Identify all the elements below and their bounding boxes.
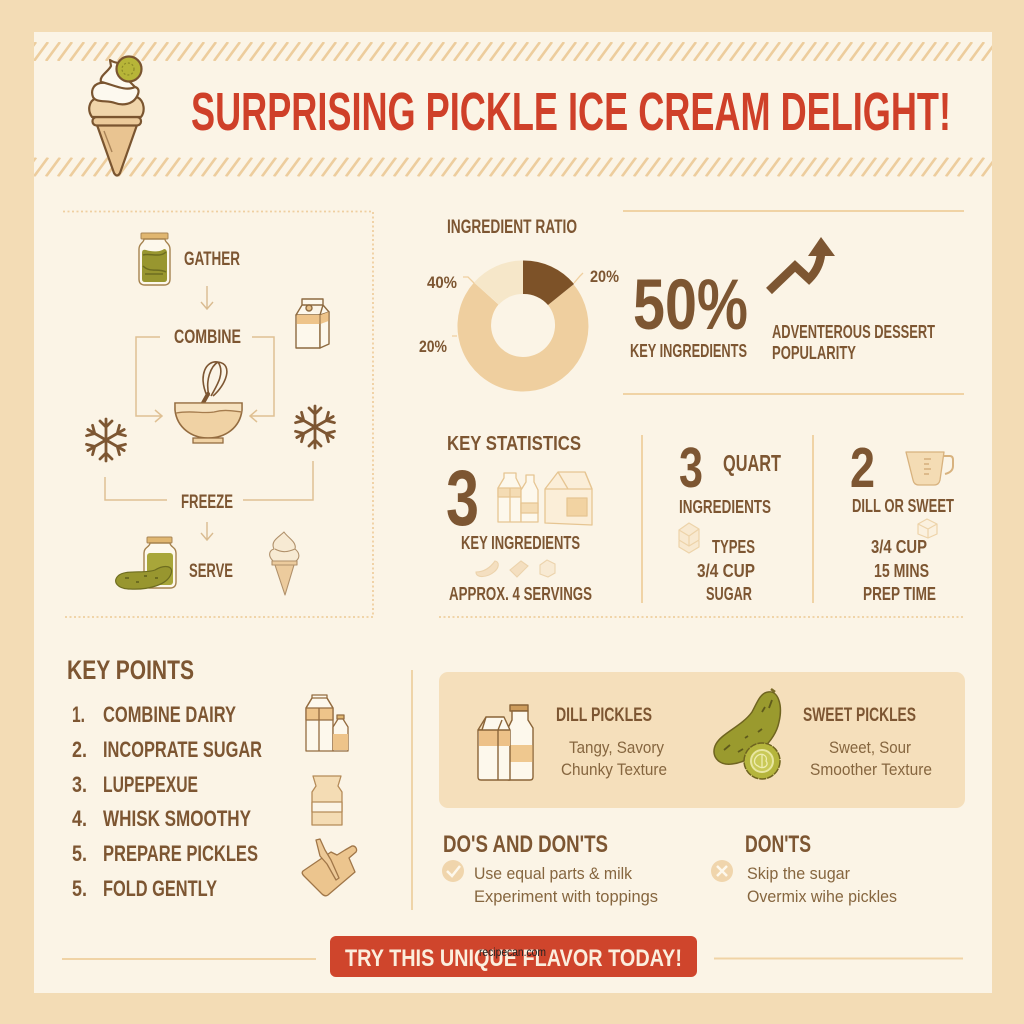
call to action button: TRY THIS UNIQUE FLAVOR TODAY! <box>345 945 682 972</box>
icon: measuring cup <box>906 452 953 485</box>
description: sweet pickles: Smoother Texture <box>810 760 932 779</box>
heading: don'ts: DON'TS <box>745 831 811 858</box>
label: sugar: SUGAR <box>706 584 752 604</box>
label: combine: COMBINE <box>174 327 241 348</box>
rule right of button <box>714 958 963 960</box>
icon: pickle jar <box>139 233 170 285</box>
list: do's: Experiment with toppings <box>474 887 658 906</box>
description: sweet pickles <box>810 738 932 779</box>
rule left of button <box>62 958 316 960</box>
icon: trending arrow <box>769 237 835 291</box>
icon: milk carton <box>296 299 329 348</box>
icon: whisk and bowl <box>175 362 242 443</box>
heading: dill pickles: DILL PICKLES <box>556 705 652 726</box>
description: dill pickles: Tangy, Savory <box>569 738 664 757</box>
icon: sugar cubes <box>679 523 699 553</box>
item 3: LUPEPEXUE <box>103 772 198 797</box>
list: don'ts <box>747 864 897 906</box>
caption: key ingredients: KEY INGREDIENTS <box>630 341 747 361</box>
arrow: right bracket <box>250 337 274 422</box>
item 4 <box>72 806 251 831</box>
icon: small cone <box>270 532 299 595</box>
label: dill or sweet: DILL OR SWEET <box>852 496 954 516</box>
icon: snowflake right <box>294 406 336 448</box>
arrow: freeze to serve <box>201 522 213 540</box>
heading: key points: KEY POINTS <box>67 655 194 685</box>
label: serve: SERVE <box>189 561 233 582</box>
arrow: gather to combine <box>201 286 213 309</box>
icon: ice cream cone with pickle slice <box>89 56 144 176</box>
label: 20 percent left: 20% <box>419 337 447 356</box>
item 5: PREPARE PICKLES <box>103 841 258 866</box>
item 4: 4. <box>72 806 87 831</box>
item 3: 3. <box>72 772 87 797</box>
label: quart: QUART <box>723 450 781 476</box>
caption: adventerous dessert popularity <box>772 322 935 363</box>
caption: adventerous dessert popularity: ADVENTEROUS DESSERT <box>772 322 935 342</box>
panel: process flow <box>63 212 373 617</box>
caption: approx 4 servings: APPROX. 4 SERVINGS <box>449 584 592 604</box>
item 1 <box>72 702 236 727</box>
heading: sweet pickles: SWEET PICKLES <box>803 705 916 726</box>
label: freeze: FREEZE <box>181 492 233 513</box>
big stat: 3 quart: 3 <box>679 436 703 500</box>
icon: pickle jar and pickle <box>116 537 176 589</box>
item 1: 1. <box>72 702 85 727</box>
description: sweet pickles: Sweet, Sour <box>829 738 911 757</box>
caption: key ingredients: KEY INGREDIENTS <box>461 533 580 553</box>
connector: freeze right <box>243 461 313 500</box>
arrow: left bracket <box>136 337 162 422</box>
label: prep time: PREP TIME <box>863 584 936 604</box>
icons: pickle, slice, cube <box>476 560 555 577</box>
header band top hatch <box>34 42 992 61</box>
big stat: 3: 3 <box>446 453 479 542</box>
icon: pickle and slice <box>714 689 780 779</box>
donut chart <box>452 260 588 391</box>
icon: dairy cartons <box>498 472 592 525</box>
item 2 <box>72 737 262 762</box>
panel: pickle comparison <box>439 672 965 808</box>
rule above donut section <box>623 210 964 212</box>
label: 20 percent right: 20% <box>590 267 619 286</box>
dotted rule <box>439 616 964 618</box>
item 6: 5. <box>72 876 87 901</box>
label: gather: GATHER <box>184 249 240 270</box>
watermark: recipecan.com <box>479 945 546 959</box>
item 4: WHISK SMOOTHY <box>103 806 251 831</box>
connector: freeze left <box>105 477 167 500</box>
big stat: 50 percent: 50% <box>633 266 748 345</box>
heading: ingredient ratio: INGREDIENT RATIO <box>447 217 577 238</box>
item 2: 2. <box>72 737 87 762</box>
icon: sugar cube <box>918 519 937 538</box>
label: 40 percent: 40% <box>427 273 457 292</box>
heading: do's and don'ts: DO'S AND DON'TS <box>443 831 608 858</box>
item 5 <box>72 841 258 866</box>
description: dill pickles <box>561 738 667 779</box>
label: 3/4 cup: 3/4 CUP <box>697 561 755 581</box>
label: 15 mins: 15 MINS <box>874 561 929 581</box>
caption: adventerous dessert popularity: POPULARITY <box>772 343 856 363</box>
item 3 <box>72 772 198 797</box>
icon: cutting board and knife <box>302 839 357 896</box>
item 6 <box>72 876 217 901</box>
big stat: 2: 2 <box>850 436 875 500</box>
icon: sugar bag <box>312 776 342 825</box>
label: ingredients: INGREDIENTS <box>679 497 771 517</box>
description: dill pickles: Chunky Texture <box>561 760 667 779</box>
heading: key statistics: KEY STATISTICS <box>447 432 581 455</box>
header band bottom hatch <box>34 158 992 176</box>
list: key points <box>72 702 262 901</box>
label: 3/4 cup: 3/4 CUP <box>871 537 927 557</box>
item 6: FOLD GENTLY <box>103 876 217 901</box>
list: don'ts: Skip the sugar <box>747 864 850 883</box>
list: do's <box>474 864 658 906</box>
divider <box>641 435 643 603</box>
label: types: TYPES <box>712 537 755 557</box>
icon: check <box>442 860 464 882</box>
icon: snowflake left <box>85 419 127 461</box>
list: don'ts: Overmix wihe pickles <box>747 887 897 906</box>
list: do's: Use equal parts & milk <box>474 864 632 883</box>
vertical divider <box>411 670 413 910</box>
rule below donut section <box>623 393 964 395</box>
item 5: 5. <box>72 841 87 866</box>
icon: dairy <box>478 705 533 780</box>
icon: carton and bottle <box>306 695 348 751</box>
item 2: INCOPRATE SUGAR <box>103 737 262 762</box>
item 1: COMBINE DAIRY <box>103 702 236 727</box>
call to action button <box>330 936 697 977</box>
divider <box>812 435 814 603</box>
icon: cross <box>711 860 733 882</box>
